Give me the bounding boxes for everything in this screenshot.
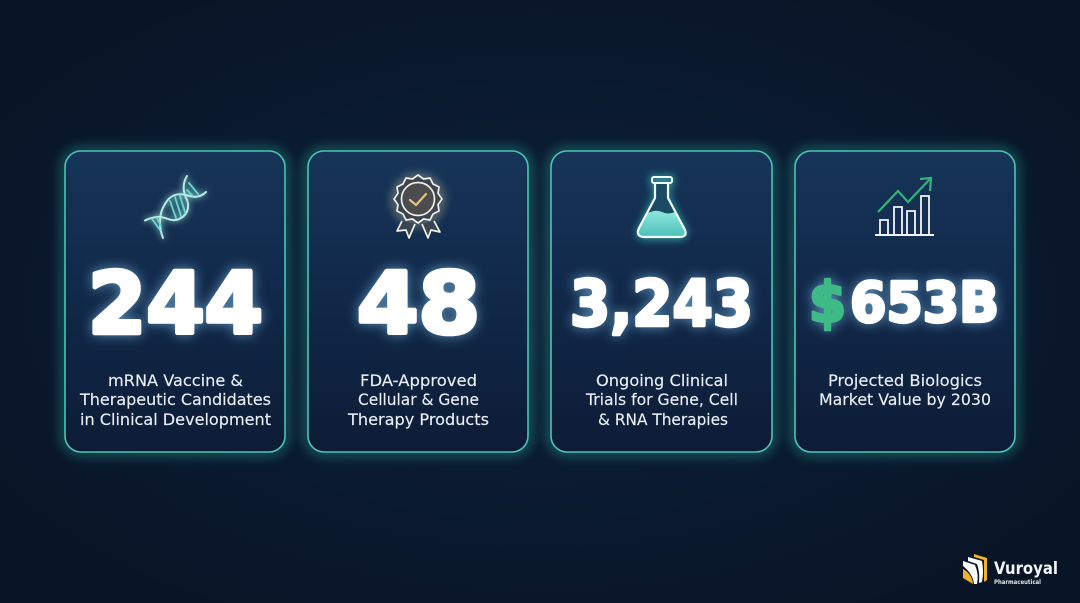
number: $653B: $ xyxy=(809,270,846,334)
label: clinical trials: Ongoing Clinical xyxy=(596,371,728,390)
logo: Vuroyal Pharmaceutical xyxy=(963,554,1058,586)
panel: FDA-approved products xyxy=(308,151,528,452)
number: 48: 48 xyxy=(357,255,480,354)
label: FDA-approved products: Therapy Products xyxy=(347,410,489,429)
panel: biologics market value xyxy=(795,151,1015,452)
number: $653B: 653B xyxy=(850,270,999,334)
label: mRNA candidates xyxy=(79,371,271,429)
label: mRNA candidates: in Clinical Development xyxy=(80,410,271,429)
label: biologics market xyxy=(819,371,991,409)
label: biologics market: Market Value by 2030 xyxy=(819,390,991,409)
icon: logo mark xyxy=(963,554,987,584)
number: 244: 244 xyxy=(88,255,263,354)
panel: ongoing clinical trials xyxy=(551,151,772,452)
panel: mRNA candidates xyxy=(65,151,285,452)
brand descriptor: Pharmaceutical xyxy=(994,578,1041,586)
icon: flask xyxy=(638,177,686,238)
label: mRNA candidates: mRNA Vaccine & xyxy=(108,371,243,390)
label: mRNA candidates: Therapeutic Candidates xyxy=(79,390,271,409)
label: biologics market: Projected Biologics xyxy=(828,371,982,390)
label: FDA-approved products: FDA-Approved xyxy=(360,371,477,390)
label: FDA-approved products xyxy=(347,371,489,429)
label: clinical trials: & RNA Therapies xyxy=(598,410,728,429)
label: clinical trials: Trials for Gene, Cell xyxy=(585,390,738,409)
brand name: Vuroyal xyxy=(994,559,1058,579)
icon: DNA helix xyxy=(145,176,206,238)
label: FDA-approved products: Cellular & Gene xyxy=(358,390,479,409)
number: 3,243: 3,243 xyxy=(570,268,753,340)
label: clinical trials xyxy=(585,371,738,429)
icon: award badge xyxy=(390,172,446,238)
icon: growth chart xyxy=(875,178,934,235)
